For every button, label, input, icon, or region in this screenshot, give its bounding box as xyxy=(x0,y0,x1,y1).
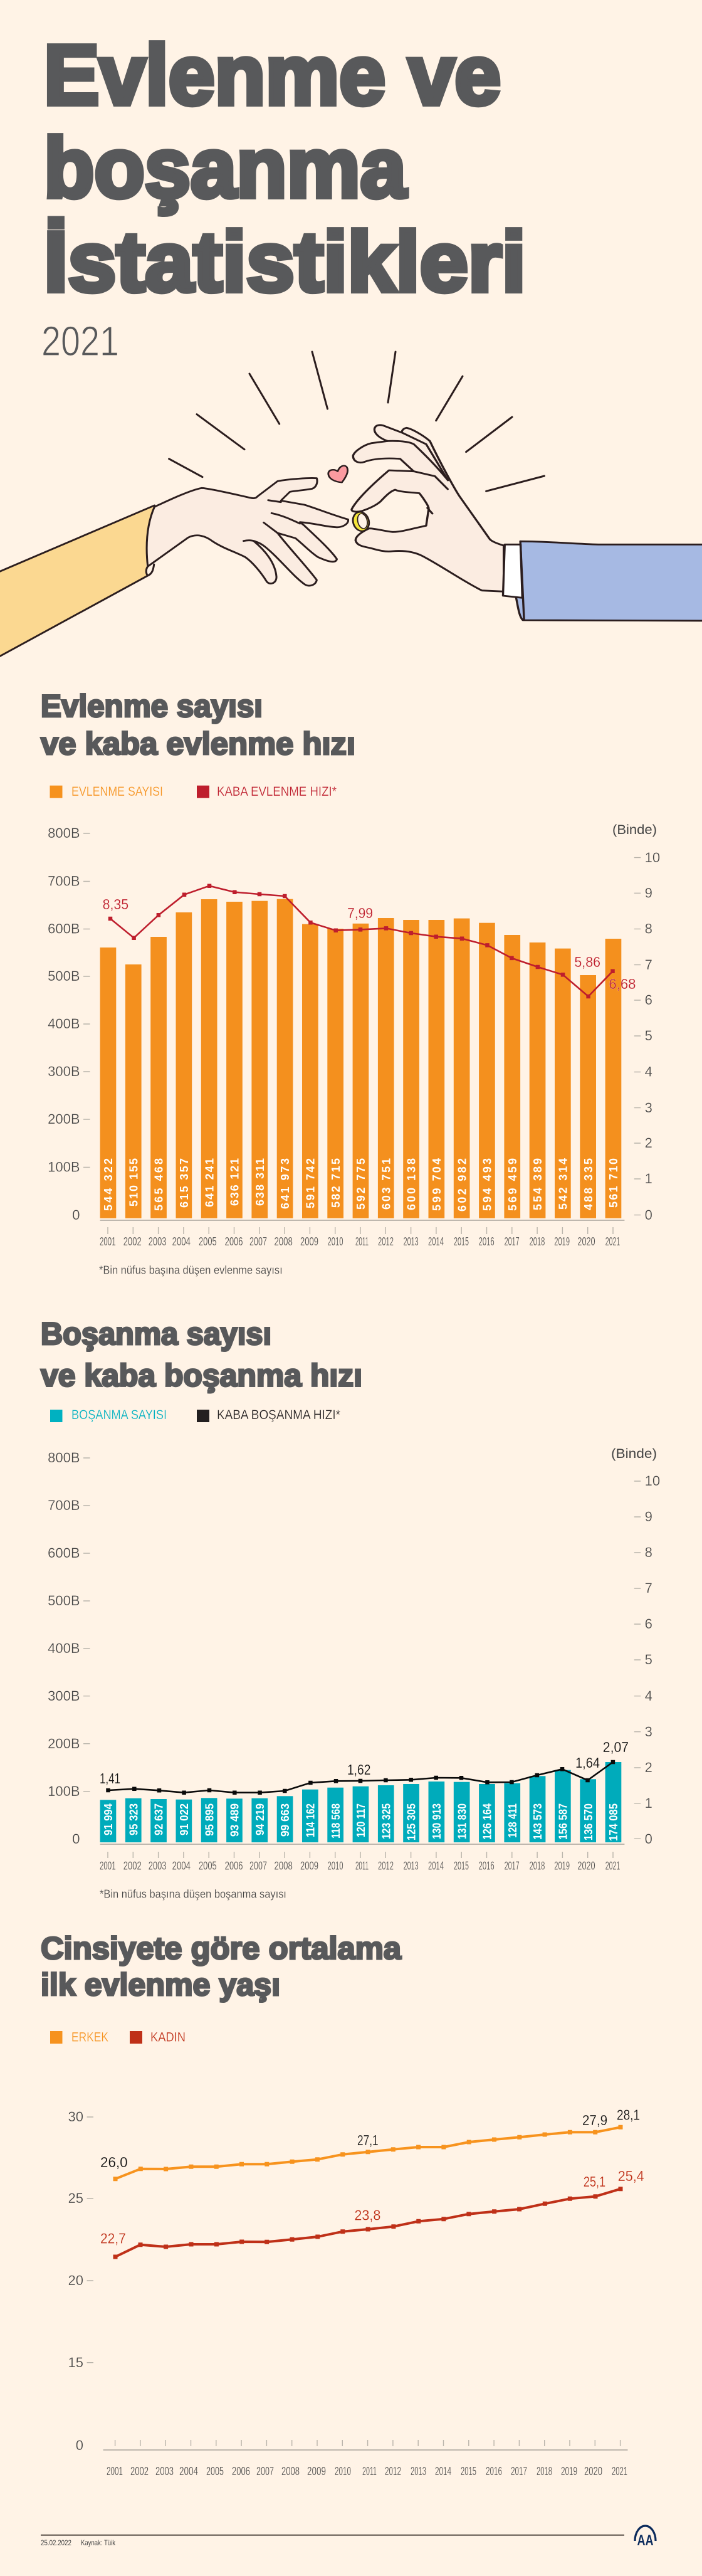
bar value labels: 594 493 xyxy=(481,1158,494,1211)
year labels: 2014 xyxy=(428,1859,444,1872)
heart xyxy=(328,466,348,482)
chart: marriages xyxy=(48,823,660,1277)
right axis: 5 xyxy=(645,1028,652,1043)
year labels: 2017 xyxy=(511,2464,527,2478)
legend: gender: KADIN xyxy=(150,2030,186,2045)
value labels: women: 25,1 xyxy=(584,2173,605,2190)
value labels: men xyxy=(100,2107,640,2170)
right axis: (Binde) xyxy=(612,823,657,837)
year labels: 2001 xyxy=(100,1235,116,1248)
legend: gender xyxy=(50,2030,186,2045)
bar value labels: 638 311 xyxy=(254,1158,266,1206)
bar value labels: 123 325 xyxy=(380,1803,392,1839)
year labels: 2008 xyxy=(281,2464,300,2478)
year labels: 2014 xyxy=(435,2464,451,2478)
year labels: 2003 xyxy=(155,2464,174,2478)
left axis: 100B xyxy=(48,1783,80,1799)
section heading: marriages: Evlenme sayısı xyxy=(41,689,263,724)
right axis: 0 xyxy=(645,1207,652,1223)
rate value labels: 8,35 xyxy=(103,896,128,912)
year labels: 2018 xyxy=(530,1235,545,1248)
baseline and year ticks xyxy=(100,1220,624,1234)
bar value labels: 599 704 xyxy=(431,1158,443,1211)
year labels: 2005 xyxy=(199,1235,217,1248)
logo: AA: AA xyxy=(637,2532,653,2549)
bar value labels: 542 314 xyxy=(557,1158,569,1210)
value labels: men: 27,1 xyxy=(357,2132,379,2148)
rate line xyxy=(110,886,613,996)
bar value labels: 600 138 xyxy=(406,1158,418,1210)
bar value labels: 118 568 xyxy=(330,1803,342,1839)
year labels: 2016 xyxy=(479,1859,495,1872)
year labels: 2013 xyxy=(404,1235,419,1248)
right axis xyxy=(611,1447,660,1847)
title: İstatistikleri xyxy=(44,214,526,309)
year labels: 2013 xyxy=(404,1859,419,1872)
year labels: 2007 xyxy=(249,1859,267,1872)
bar value labels: 569 459 xyxy=(506,1158,519,1211)
section heading: divorces: ve kaba boşanma hızı xyxy=(41,1358,362,1393)
year labels: 2006 xyxy=(225,1859,243,1872)
right axis: 2 xyxy=(645,1135,652,1151)
rate value labels: 5,86 xyxy=(574,954,600,970)
bar value labels: 510 155 xyxy=(127,1158,140,1206)
right arm and hand xyxy=(328,425,702,621)
title xyxy=(44,28,526,309)
year labels: 2013 xyxy=(411,2464,426,2478)
right axis: 5 xyxy=(645,1652,652,1667)
right axis: 4 xyxy=(645,1064,652,1080)
illustration: hands with ring xyxy=(0,352,702,657)
bar value labels: 114 162 xyxy=(305,1803,317,1837)
year labels: 2009 xyxy=(307,2464,326,2478)
bar value labels: 125 305 xyxy=(406,1803,418,1840)
right axis: 8 xyxy=(645,1544,652,1560)
year labels: 2012 xyxy=(385,2464,401,2478)
right axis: 10 xyxy=(645,1473,660,1489)
chart: first marriage age xyxy=(68,2107,644,2478)
year labels: 2012 xyxy=(378,1859,394,1872)
left axis xyxy=(48,1450,90,1847)
year labels: 2021 xyxy=(605,1859,620,1872)
year labels: 2008 xyxy=(275,1859,293,1872)
bar value labels: 591 742 xyxy=(305,1158,317,1208)
rate value labels: 1,41 xyxy=(100,1770,120,1787)
year labels: 2005 xyxy=(199,1859,217,1872)
right axis: 3 xyxy=(645,1100,652,1116)
date and source: Kaynak: Tüik xyxy=(81,2538,116,2547)
year labels: 2007 xyxy=(256,2464,274,2478)
bar value labels: 99 663 xyxy=(279,1803,291,1837)
year labels: 2015 xyxy=(454,1859,469,1872)
baseline and year ticks xyxy=(100,1844,624,1858)
value labels: men: 28,1 xyxy=(617,2107,640,2123)
right axis: 7 xyxy=(645,957,652,973)
left axis: 400B xyxy=(48,1640,80,1656)
left axis: 300B xyxy=(48,1688,80,1704)
left arm and hand xyxy=(0,478,348,657)
legend: gender: ERKEK xyxy=(71,2030,108,2045)
bar value labels: 554 389 xyxy=(532,1158,544,1210)
year labels xyxy=(100,1859,620,1872)
year labels: 2006 xyxy=(225,1235,243,1248)
right axis: 4 xyxy=(645,1688,652,1704)
year labels: 2002 xyxy=(130,2464,149,2478)
title: boşanma xyxy=(44,120,407,215)
year labels: 2009 xyxy=(300,1859,318,1872)
year labels: 2011 xyxy=(355,1235,369,1248)
year labels: 2007 xyxy=(249,1235,267,1248)
bar value labels: 592 775 xyxy=(355,1158,367,1210)
section heading: first marriage age: Cinsiyete göre ortalama xyxy=(41,1931,402,1966)
year labels: 2019 xyxy=(561,2464,577,2478)
left axis: 700B xyxy=(48,873,80,889)
section heading: divorces: Boşanma sayısı xyxy=(41,1316,271,1351)
year labels: 2020 xyxy=(584,2464,602,2478)
year labels: 2002 xyxy=(123,1235,142,1248)
left axis: 400B xyxy=(48,1016,80,1032)
y axis xyxy=(68,2109,93,2453)
left axis: 800B xyxy=(48,1450,80,1465)
value labels: women: 25,4 xyxy=(618,2168,644,2184)
left axis: 500B xyxy=(48,968,80,984)
rate value labels: 1,64 xyxy=(575,1755,600,1771)
bar value labels: 126 164 xyxy=(481,1803,494,1840)
legend: divorces: KABA BOŞANMA HIZI* xyxy=(217,1408,340,1422)
bar value labels: 91 994 xyxy=(102,1803,115,1835)
line: women xyxy=(115,2189,621,2257)
y axis: 25 xyxy=(68,2190,83,2206)
right axis: 6 xyxy=(645,992,652,1008)
year labels: 2018 xyxy=(530,1859,545,1872)
y axis: 20 xyxy=(68,2272,83,2288)
year labels: 2020 xyxy=(577,1235,595,1248)
year labels: 2002 xyxy=(123,1859,142,1872)
bar value labels: 174 085 xyxy=(607,1803,620,1841)
year labels: 2020 xyxy=(577,1859,595,1872)
right axis: 6 xyxy=(645,1616,652,1632)
left axis: 0 xyxy=(72,1831,80,1847)
bar value labels: 95 895 xyxy=(203,1803,216,1836)
bar value labels: 603 751 xyxy=(380,1158,392,1210)
year labels: 2017 xyxy=(505,1859,520,1872)
year labels: 2012 xyxy=(378,1235,394,1248)
bar value labels: 641 973 xyxy=(279,1158,291,1209)
year labels: 2016 xyxy=(479,1235,495,1248)
right axis: 9 xyxy=(645,1509,652,1524)
year subtitle: 2021 xyxy=(41,318,119,365)
bar value labels: 120 117 xyxy=(355,1803,367,1837)
year labels: 2009 xyxy=(300,1235,318,1248)
rate value labels xyxy=(100,1739,629,1787)
bar value labels: 602 982 xyxy=(456,1158,468,1211)
year labels: 2010 xyxy=(327,1859,343,1872)
left axis: 0 xyxy=(72,1207,80,1223)
footnote: *Bin nüfus başına düşen boşanma sayısı xyxy=(100,1888,286,1901)
rate value labels: 6,68 xyxy=(609,976,636,992)
bar value labels: 565 468 xyxy=(153,1158,165,1211)
legend: divorces: BOŞANMA SAYISI xyxy=(71,1408,167,1422)
bars xyxy=(100,1762,621,1842)
rate value labels: 2,07 xyxy=(603,1739,629,1755)
legend: marriages xyxy=(50,784,337,799)
value labels: men: 27,9 xyxy=(582,2112,607,2128)
bar value labels: 582 715 xyxy=(330,1158,342,1208)
shirt cuff xyxy=(503,544,522,598)
rate value labels: 7,99 xyxy=(347,905,373,921)
left axis xyxy=(48,825,90,1223)
title: Evlenme ve xyxy=(44,28,501,122)
baseline and year ticks xyxy=(103,2440,628,2450)
bars xyxy=(100,899,621,1218)
right axis: 3 xyxy=(645,1724,652,1739)
bar value labels: 156 587 xyxy=(557,1803,569,1840)
rate line xyxy=(108,1762,613,1793)
bar value labels: 130 913 xyxy=(431,1803,443,1839)
y axis: 30 xyxy=(68,2109,83,2125)
bar value labels: 641 241 xyxy=(203,1158,216,1207)
right axis: 1 xyxy=(645,1795,652,1811)
right axis: 10 xyxy=(645,850,660,865)
year labels xyxy=(107,2464,627,2478)
year labels: 2015 xyxy=(454,1235,469,1248)
bar value labels: 95 323 xyxy=(127,1803,140,1835)
year labels: 2003 xyxy=(149,1235,166,1248)
year labels: 2001 xyxy=(100,1859,116,1872)
bar value labels: 615 357 xyxy=(178,1158,191,1208)
y axis: 15 xyxy=(68,2355,83,2370)
right axis: (Binde) xyxy=(611,1447,657,1461)
year labels: 2010 xyxy=(335,2464,351,2478)
year labels: 2011 xyxy=(362,2464,377,2478)
left axis: 600B xyxy=(48,921,80,937)
value labels: women xyxy=(100,2168,644,2247)
date and source xyxy=(41,2538,116,2547)
legend: marriages: KABA EVLENME HIZI* xyxy=(217,784,337,799)
bar value labels: 128 411 xyxy=(506,1803,519,1838)
left axis: 100B xyxy=(48,1159,80,1175)
bar value labels: 544 322 xyxy=(102,1158,115,1211)
year labels: 2015 xyxy=(461,2464,476,2478)
bar value labels: 131 830 xyxy=(456,1803,468,1839)
rate value labels: 1,62 xyxy=(347,1761,370,1778)
bar value labels xyxy=(102,1158,620,1211)
value labels: men: 26,0 xyxy=(100,2154,128,2170)
legend: marriages: EVLENME SAYISI xyxy=(71,784,163,799)
year labels xyxy=(100,1235,620,1248)
year labels: 2019 xyxy=(554,1235,570,1248)
year labels: 2010 xyxy=(327,1235,343,1248)
bar value labels: 92 637 xyxy=(153,1803,165,1835)
date and source: 25.02.2022 xyxy=(41,2538,71,2547)
bar value labels: 636 121 xyxy=(229,1158,241,1206)
footnote: *Bin nüfus başına düşen evlenme sayısı xyxy=(99,1264,283,1277)
ring xyxy=(351,511,371,532)
right axis: 0 xyxy=(645,1831,652,1847)
section heading: first marriage age: ilk evlenme yaşı xyxy=(41,1967,280,2002)
y axis: 0 xyxy=(76,2437,83,2453)
year labels: 2011 xyxy=(355,1859,369,1872)
bar value labels: 94 219 xyxy=(254,1803,266,1835)
bar value labels: 93 489 xyxy=(229,1803,241,1837)
section heading: divorces xyxy=(41,1316,362,1393)
right axis: 8 xyxy=(645,921,652,937)
year labels: 2005 xyxy=(206,2464,224,2478)
section heading: first marriage age xyxy=(41,1931,402,2002)
year labels: 2018 xyxy=(537,2464,552,2478)
logo: AA xyxy=(635,2526,656,2549)
year labels: 2014 xyxy=(428,1235,444,1248)
year labels: 2019 xyxy=(554,1859,570,1872)
year labels: 2017 xyxy=(505,1235,520,1248)
left axis: 200B xyxy=(48,1736,80,1751)
right axis: 2 xyxy=(645,1760,652,1775)
rate value labels xyxy=(103,896,636,992)
legend: divorces xyxy=(50,1408,340,1422)
year labels: 2001 xyxy=(107,2464,123,2478)
year labels: 2016 xyxy=(486,2464,502,2478)
left axis: 600B xyxy=(48,1545,80,1561)
year labels: 2003 xyxy=(149,1859,166,1872)
bar value labels: 561 710 xyxy=(607,1158,620,1208)
year labels: 2021 xyxy=(612,2464,627,2478)
bar value labels: 91 022 xyxy=(178,1803,191,1835)
year labels: 2004 xyxy=(172,1859,191,1872)
year labels: 2004 xyxy=(179,2464,198,2478)
left axis: 800B xyxy=(48,825,80,841)
bar value labels: 488 335 xyxy=(582,1158,595,1210)
bar value labels: 143 573 xyxy=(532,1803,544,1840)
right axis xyxy=(612,823,660,1223)
left axis: 700B xyxy=(48,1497,80,1513)
right axis: 9 xyxy=(645,885,652,900)
bar value labels: 136 570 xyxy=(582,1803,595,1840)
footer xyxy=(41,2526,656,2549)
left axis: 300B xyxy=(48,1064,80,1079)
right axis: 1 xyxy=(645,1171,652,1186)
bar value labels xyxy=(102,1803,620,1841)
value labels: women: 23,8 xyxy=(354,2207,380,2224)
section heading: marriages xyxy=(41,689,355,761)
left axis: 500B xyxy=(48,1593,80,1608)
chart: divorces xyxy=(48,1447,660,1901)
year labels: 2006 xyxy=(232,2464,250,2478)
year labels: 2004 xyxy=(172,1235,191,1248)
year labels: 2008 xyxy=(275,1235,293,1248)
right axis: 7 xyxy=(645,1580,652,1596)
year labels: 2021 xyxy=(605,1235,620,1248)
value labels: women: 22,7 xyxy=(100,2230,126,2247)
line: men xyxy=(115,2127,621,2179)
sparkle rays xyxy=(169,352,545,491)
left axis: 200B xyxy=(48,1111,80,1127)
section heading: marriages: ve kaba evlenme hızı xyxy=(41,726,355,761)
